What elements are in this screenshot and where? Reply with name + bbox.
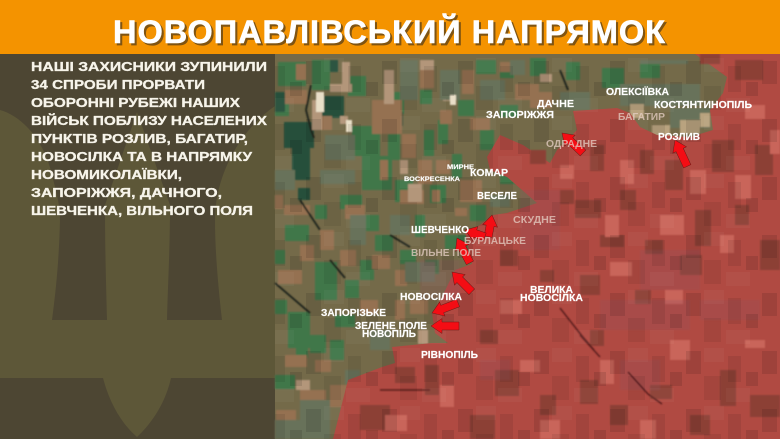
map labels: settlements: РІВНОПІЛЬ <box>421 350 478 361</box>
map labels: settlements: МИРНЕ <box>447 164 475 171</box>
panel: text block: НОВОСІЛКА ТА В НАПРЯМКУ <box>31 149 253 164</box>
map labels: settlements: РОЗЛИВ <box>658 132 700 143</box>
arrow: Vesele <box>481 214 499 238</box>
satellite map <box>275 54 780 439</box>
panel: text block <box>31 59 267 218</box>
map labels: settlements: ВЕЛИКА <box>530 285 573 296</box>
arrow: north of Novosilka <box>447 267 477 297</box>
arrow: Odradne <box>557 128 588 158</box>
panel: text block: ВІЙСЬК ПОБЛИЗУ НАСЕЛЕНИХ <box>31 113 267 128</box>
map labels: settlements: НОВОСІЛКА <box>400 292 462 303</box>
panel: text block: НОВОМИКОЛАЇВКИ, <box>31 167 182 182</box>
panel: text block: НАШІ ЗАХИСНИКИ ЗУПИНИЛИ <box>31 59 267 74</box>
arrow: Zelene Pole <box>431 318 459 334</box>
title: НОВОПАВЛІВСЬКИЙ НАПРЯМОК <box>113 12 665 50</box>
map labels: settlements: НОВОСІЛКА <box>520 293 583 304</box>
panel: text block: ЗАПОРІЖЖЯ, ДАЧНОГО, <box>31 185 222 200</box>
arrow: Novosilka <box>429 296 461 320</box>
map labels: settlements: ШЕВЧЕНКО <box>411 225 469 236</box>
map labels: contested settlements: ОДРАДНЕ <box>546 139 597 150</box>
map labels: settlements: ВОСКРЕСЕНКА <box>404 176 460 183</box>
map labels: settlements: КОСТЯНТИНОПІЛЬ <box>654 100 752 111</box>
panel: left text panel with trident <box>0 54 275 439</box>
map labels: settlements: ЗАПОРІЗЬКЕ <box>321 308 386 319</box>
panel: text block: 34 СПРОБИ ПРОРВАТИ <box>31 77 205 92</box>
map labels: settlements: НОВОПІЛЬ <box>362 329 416 340</box>
map labels: contested settlements: БУРЛАЦЬКЕ <box>464 236 526 247</box>
map labels: contested settlements: БАГАТИР <box>618 112 665 123</box>
map labels: contested settlements: ВІЛЬНЕ ПОЛЕ <box>411 248 481 259</box>
title bar <box>0 0 780 54</box>
map labels: contested settlements <box>411 112 665 259</box>
icon: trident emblem <box>0 106 275 437</box>
arrow: Rozliv <box>668 137 694 169</box>
panel: text block: ОБОРОННІ РУБЕЖІ НАШИХ <box>31 95 240 110</box>
map labels: settlements: ЗЕЛЕНЕ ПОЛЕ <box>355 321 427 332</box>
panel: text block: ШЕВЧЕНКА, ВІЛЬНОГО ПОЛЯ <box>31 203 253 218</box>
title shadow: НОВОПАВЛІВСЬКИЙ НАПРЯМОК <box>115 14 667 52</box>
arrow: Shevchenko <box>463 223 487 244</box>
red occupied zone overlay <box>333 54 780 439</box>
map labels: settlements: ВЕСЕЛЕ <box>477 191 517 202</box>
map labels: settlements: ЗАПОРІЖЖЯ <box>486 110 554 121</box>
map field texture <box>275 54 780 439</box>
panel: text block: ПУНКТІВ РОЗЛИВ, БАГАТИР, <box>31 131 248 146</box>
map labels: settlements <box>321 87 752 361</box>
map arrows <box>429 128 694 334</box>
map labels: settlements: КОМАР <box>470 168 508 179</box>
map labels: settlements: ДАЧНЕ <box>537 99 574 110</box>
arrow: Vilne Pole <box>450 235 477 266</box>
map labels: contested settlements: СКУДНЕ <box>513 215 557 226</box>
map labels: settlements: ОЛЕКСІЇВКА <box>606 87 669 98</box>
